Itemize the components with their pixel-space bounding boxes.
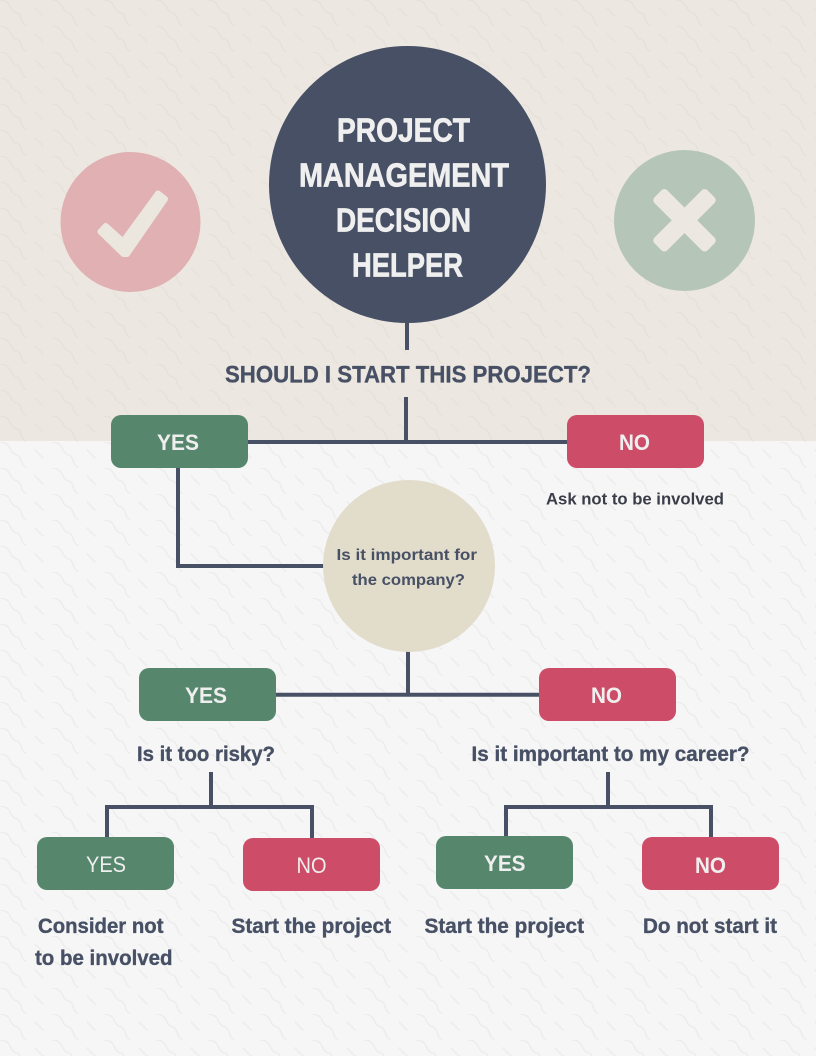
button: middle yes [139, 668, 276, 721]
button: risky yes [37, 837, 174, 890]
title text: MANAGEMENT [299, 156, 509, 194]
title text: PROJECT [337, 112, 470, 148]
text: start the project, right: Start the project [424, 915, 584, 938]
icon: cross in green circle [614, 150, 755, 291]
button: risky no: NO [296, 853, 326, 878]
text: is it important to my career: Is it important to my career? [472, 743, 750, 766]
button: career no: NO [695, 853, 726, 878]
text: consider not to be involved: to be involved [35, 947, 172, 970]
text: do not start it: Do not start it [643, 915, 777, 938]
title circle [269, 46, 546, 323]
text: ask not to be involved: Ask not to be involved [546, 490, 724, 508]
title text: HELPER [352, 246, 463, 284]
button: risky no [243, 838, 380, 891]
text: consider not to be involved [35, 915, 172, 970]
decision circle: important for the company [323, 480, 495, 652]
decision circle: important for the company: the company? [352, 572, 465, 589]
heading: first question: SHOULD I START THIS PROJECT? [225, 362, 591, 388]
text: consider not to be involved: Consider not [38, 915, 164, 938]
button: middle no: NO [591, 683, 622, 708]
button: risky yes: YES [86, 852, 126, 877]
text: start the project, left: Start the project [232, 915, 391, 938]
title text: DECISION [336, 202, 471, 238]
button: middle no [539, 668, 676, 721]
button: top yes: YES [157, 430, 199, 455]
button: career yes: YES [484, 851, 526, 876]
connector lines [105, 320, 713, 840]
button: top no: NO [619, 430, 650, 455]
title text [299, 112, 509, 284]
button: top yes [111, 415, 248, 468]
button: career no [642, 837, 779, 890]
icon: check mark in pink circle [60, 152, 200, 292]
text: is it too risky: Is it too risky? [137, 743, 275, 766]
button: middle yes: YES [185, 683, 227, 708]
button: career yes [436, 836, 573, 889]
button: top no [567, 415, 704, 468]
decision circle: important for the company: Is it important for [336, 547, 477, 564]
